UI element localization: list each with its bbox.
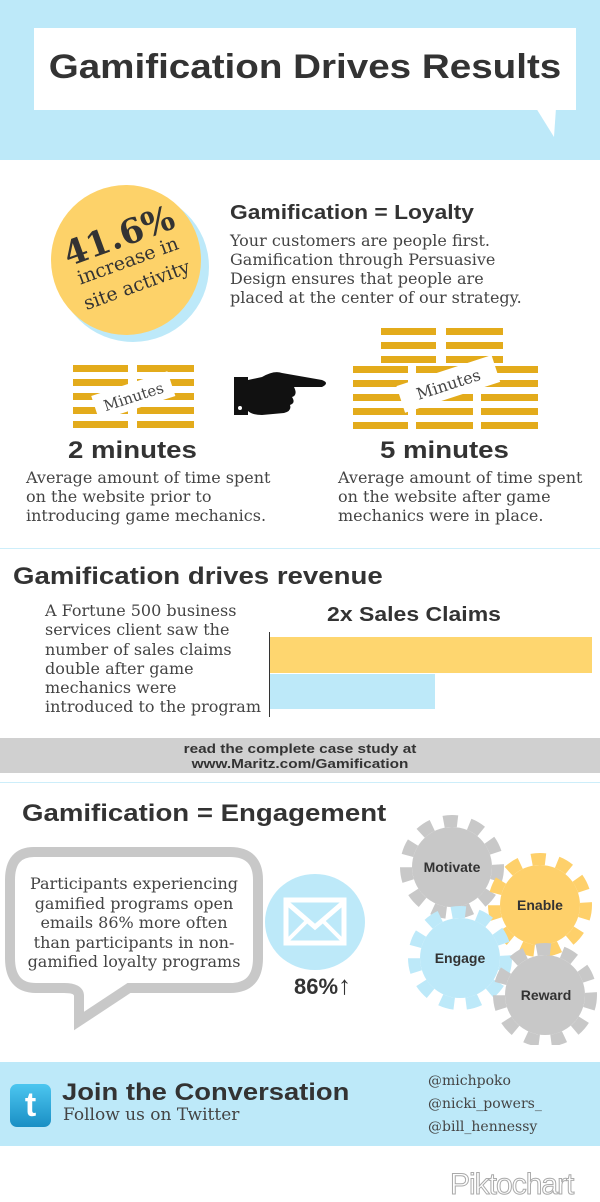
text: after: [338, 468, 582, 525]
bar chart: sales claims: [269, 604, 592, 717]
heading: engagement: Gamification = Engagement: [22, 800, 386, 827]
logo: Piktochart: Piktochart: [450, 1168, 573, 1201]
loyalty text: Your customers are people first.: [230, 231, 490, 250]
revenue text: number of sales claims: [45, 640, 232, 659]
loyalty text: Gamification through Persuasive: [230, 250, 495, 269]
icon: 2 minute bars: Minutes: [101, 379, 166, 415]
footer subtitle: Follow us on Twitter: [63, 1105, 239, 1125]
stat circle 41.6%: increase in: [74, 233, 182, 289]
revenue text: [44, 601, 261, 716]
loyalty text: placed at the center of our strategy.: [230, 288, 522, 307]
stat: 5 minutes: 5 minutes: [380, 437, 509, 464]
case study band: www.Maritz.com/Gamification: [192, 756, 408, 771]
loyalty text: Design ensures that people are: [230, 269, 484, 288]
twitter handles: @nicki_powers_: [428, 1096, 542, 1112]
icon: 5 minute bars: Minutes: [414, 365, 483, 404]
stat: 86%: 86%↑: [294, 970, 351, 1000]
gears: Reward: [521, 987, 571, 1003]
speech bubble: emails 86% more often: [40, 913, 228, 932]
text: after: Average amount of time spent: [338, 468, 582, 487]
text: before: on the website prior to: [26, 487, 211, 506]
icon: email circle: [265, 874, 365, 970]
title box: [34, 28, 576, 110]
text: after: on the website after game: [338, 487, 551, 506]
title bubble tail: [537, 110, 556, 137]
revenue text: A Fortune 500 business: [45, 601, 236, 620]
text: before: Average amount of time spent: [26, 468, 270, 487]
gears: Enable: [517, 897, 563, 913]
twitter handles: @michpoko: [428, 1073, 511, 1089]
gears: Engage: [435, 950, 485, 966]
text: before: introducing game mechanics.: [26, 506, 266, 525]
stat: 2 minutes: 2 minutes: [68, 437, 197, 464]
twitter handles: [428, 1073, 542, 1135]
footer band: [0, 1062, 600, 1146]
heading: revenue: Gamification drives revenue: [13, 563, 383, 590]
revenue text: services client saw the: [45, 620, 229, 639]
icon: twitter: [10, 1084, 51, 1127]
revenue text: introduced to the program: [45, 697, 261, 716]
revenue text: mechanics were: [45, 678, 176, 697]
icon: pointing hand: [234, 372, 326, 415]
speech bubble: than participants in non-: [34, 932, 234, 952]
speech bubble: gamified loyalty programs: [28, 952, 240, 971]
revenue text: double after game: [45, 659, 194, 678]
icon: 5 minute bars: [353, 328, 538, 429]
case study band: read the complete case study at: [184, 741, 416, 756]
text: after: mechanics were in place.: [338, 506, 543, 525]
icon: 2 minute bars: [73, 365, 194, 428]
footer heading: Join the Conversation: [62, 1079, 349, 1106]
bar chart: sales claims: 2x Sales Claims: [327, 604, 501, 626]
title: Gamification Drives Results: [49, 48, 561, 86]
stat circle 41.6%: [51, 185, 209, 342]
stat circle 41.6%: site activity: [81, 256, 193, 315]
gears: Motivate: [424, 859, 481, 875]
header band: [0, 0, 600, 160]
loyalty text: [230, 231, 522, 307]
heading: loyalty: Gamification = Loyalty: [230, 202, 474, 224]
gears: [400, 815, 597, 1045]
icon: twitter: t: [25, 1086, 36, 1124]
text: before: [26, 468, 270, 525]
speech bubble: [5, 847, 263, 1030]
stat circle 41.6%: 41.6%: [58, 198, 180, 275]
case study band: [0, 738, 600, 773]
speech bubble: gamified programs open: [35, 894, 233, 912]
twitter handles: @bill_hennessy: [428, 1119, 537, 1135]
speech bubble: Participants experiencing: [30, 874, 238, 893]
